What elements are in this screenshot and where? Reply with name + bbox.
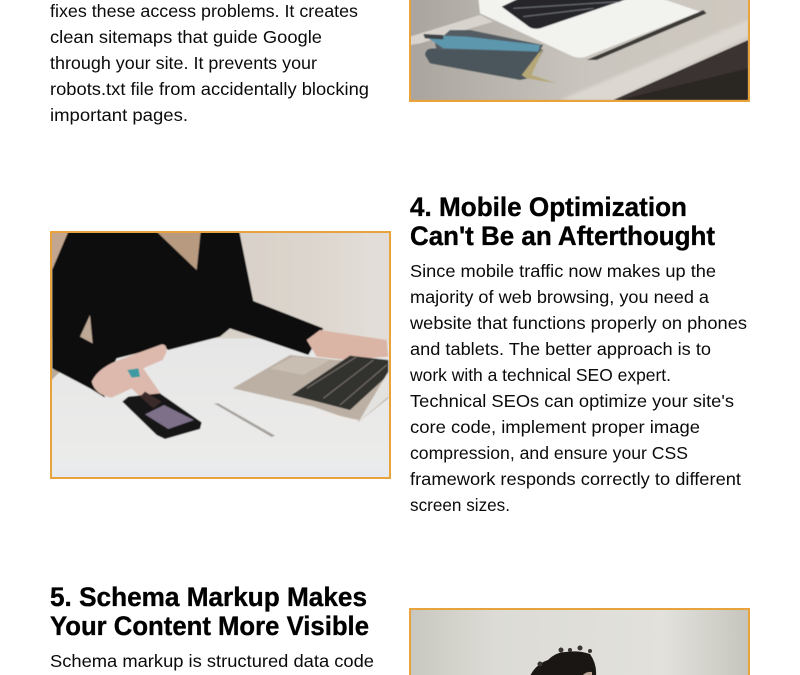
heading: section 4 mobile optimization (410, 192, 715, 251)
heading: section 4 mobile optimization: 4. Mobile Optimization (410, 192, 687, 222)
text block: technical SEO access problems (50, 1, 369, 125)
text block: mobile optimization body: and tablets. The better approach is to (410, 339, 711, 359)
text block: mobile optimization body: framework responds correctly to different (410, 469, 741, 489)
text block: schema markup body: Schema markup is structured data code (50, 651, 374, 671)
text block: mobile optimization body: website that functions properly on phones (409, 313, 747, 333)
text block: mobile optimization body: Since mobile traffic now makes up the (410, 261, 716, 281)
heading: section 5 schema markup (50, 582, 369, 641)
text block: technical SEO access problems: important pages. (50, 105, 188, 125)
photo: person with curly hair against a pale wall (409, 608, 750, 675)
text block: mobile optimization body (409, 261, 747, 515)
heading: section 4 mobile optimization: Can't Be an Afterthought (410, 221, 715, 251)
text block: mobile optimization body: screen sizes. (410, 495, 510, 515)
text block: mobile optimization body: core code, implement proper image (410, 417, 700, 437)
photo: laptop and notebook on a wooden desk (409, 0, 750, 102)
heading: section 5 schema markup: 5. Schema Markup Makes (50, 582, 367, 612)
text block: technical SEO access problems: fixes these access problems. It creates (50, 1, 358, 21)
text block: technical SEO access problems: through your site. It prevents your (50, 53, 317, 73)
photo: woman using a smartphone beside a laptop (50, 231, 391, 479)
text block: mobile optimization body: work with a technical SEO expert. (409, 365, 671, 385)
text block: mobile optimization body: Technical SEOs can optimize your site's (410, 391, 734, 411)
text block: technical SEO access problems: robots.txt file from accidentally blocking (50, 79, 369, 99)
text block: mobile optimization body: compression, and ensure your CSS (410, 443, 688, 463)
text block: technical SEO access problems: clean sitemaps that guide Google (50, 27, 322, 47)
text block: mobile optimization body: majority of web browsing, you need a (410, 287, 709, 307)
heading: section 5 schema markup: Your Content More Visible (50, 611, 369, 641)
